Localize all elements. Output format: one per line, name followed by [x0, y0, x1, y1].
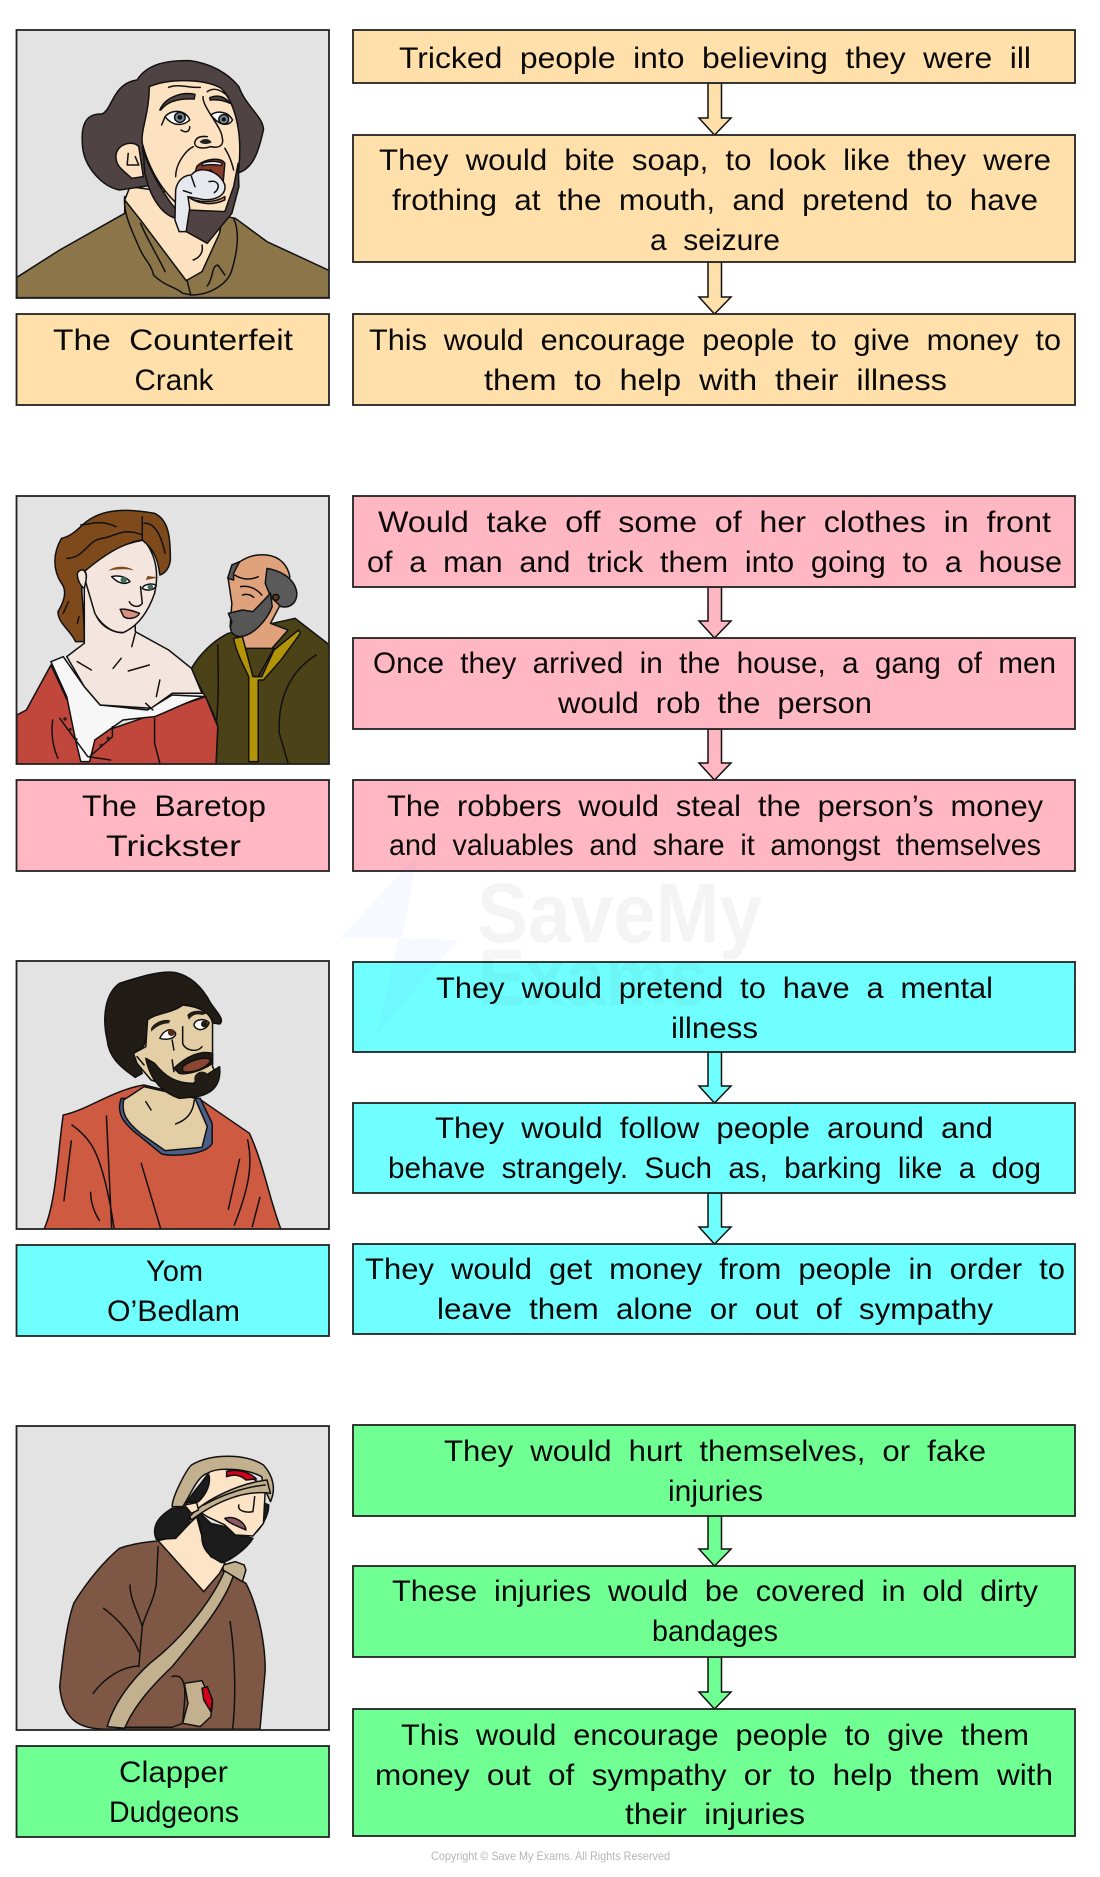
arrow — [699, 1657, 731, 1709]
step box: The robbers would steal the person’s money — [387, 790, 1043, 823]
step box: They would follow people around and — [435, 1112, 993, 1145]
step box: They would bite soap, to look like they were — [379, 144, 1051, 177]
portrait: man frothing at the mouth — [16, 30, 330, 298]
name label: Clapper Dudgeons: Dudgeons — [109, 1796, 239, 1829]
foam from mouth — [175, 170, 225, 232]
step box: of a man and trick them into going to a house — [367, 546, 1062, 579]
panel: Yom O'Bedlam — [16, 855, 1075, 1863]
arrow — [699, 1193, 731, 1244]
step box: injuries — [668, 1475, 763, 1508]
portrait: woman and older man — [16, 496, 330, 764]
portrait: bandaged man with arm in sling — [16, 1426, 329, 1730]
step box: This would encourage people to give them — [401, 1719, 1029, 1752]
panel: The Baretop Trickster — [16, 496, 1075, 1863]
arrow — [699, 587, 731, 638]
step box — [353, 1244, 1075, 1334]
step box — [353, 1566, 1075, 1657]
name label: Clapper Dudgeons — [16, 1746, 329, 1837]
name label: The Counterfeit Crank: The Counterfeit — [53, 324, 293, 357]
copyright: Copyright © Save My Exams. All Rights Reserved — [431, 1849, 670, 1863]
step box: them to help with their illness — [484, 364, 947, 397]
portrait: man looking upward in red tunic — [16, 961, 329, 1229]
step box: Would take off some of her clothes in front — [378, 506, 1051, 539]
name label: The Baretop Trickster: The Baretop — [82, 790, 266, 823]
step box — [353, 962, 1075, 1052]
name label: Yom O'Bedlam: O’Bedlam — [107, 1295, 240, 1328]
watermark: SaveMy — [477, 866, 762, 960]
step box — [353, 780, 1075, 871]
arrow — [699, 1516, 731, 1566]
step box: They would get money from people in order to — [365, 1253, 1065, 1286]
step box — [353, 638, 1075, 729]
arrow — [699, 83, 731, 135]
step box: Tricked people into believing they were ill — [399, 42, 1031, 75]
step box — [353, 496, 1075, 587]
name label: The Counterfeit Crank — [16, 314, 329, 405]
name label: Clapper Dudgeons: Clapper — [119, 1756, 228, 1789]
step box: bandages — [652, 1615, 778, 1648]
step box: illness — [671, 1012, 758, 1045]
step box — [353, 314, 1075, 405]
step box: and valuables and share it amongst themselves — [389, 829, 1041, 862]
step box: These injuries would be covered in old dirty — [392, 1575, 1038, 1608]
name label: The Baretop Trickster: Trickster — [106, 830, 241, 863]
watermark — [340, 855, 762, 1033]
step box: behave strangely. Such as, barking like a dog — [388, 1152, 1041, 1185]
step box — [353, 135, 1075, 262]
name label: The Baretop Trickster — [16, 780, 329, 871]
watermark: Exams — [478, 933, 708, 1022]
step box: They would pretend to have a mental — [436, 972, 993, 1005]
step box: They would hurt themselves, or fake — [444, 1435, 986, 1468]
step box: their injuries — [625, 1798, 805, 1831]
step box: money out of sympathy or to help them with — [375, 1759, 1053, 1792]
step box — [353, 1709, 1075, 1836]
panel: Clapper Dudgeons — [16, 855, 1075, 1863]
step box: a seizure — [650, 224, 780, 257]
name label: Yom O'Bedlam: Yom — [146, 1255, 203, 1288]
step box: leave them alone or out of sympathy — [437, 1293, 993, 1326]
step box: This would encourage people to give money to — [369, 324, 1061, 357]
step box — [353, 1425, 1075, 1516]
step box: Once they arrived in the house, a gang of men — [373, 647, 1056, 680]
step box — [353, 1103, 1075, 1193]
name label: Yom O'Bedlam — [16, 1245, 329, 1336]
arrow — [699, 729, 731, 780]
step box: frothing at the mouth, and pretend to have — [392, 184, 1038, 217]
step box — [353, 30, 1075, 83]
arrow — [699, 262, 731, 314]
name label: The Counterfeit Crank: Crank — [134, 364, 214, 397]
arrow — [699, 1052, 731, 1103]
step box: would rob the person — [557, 687, 872, 720]
